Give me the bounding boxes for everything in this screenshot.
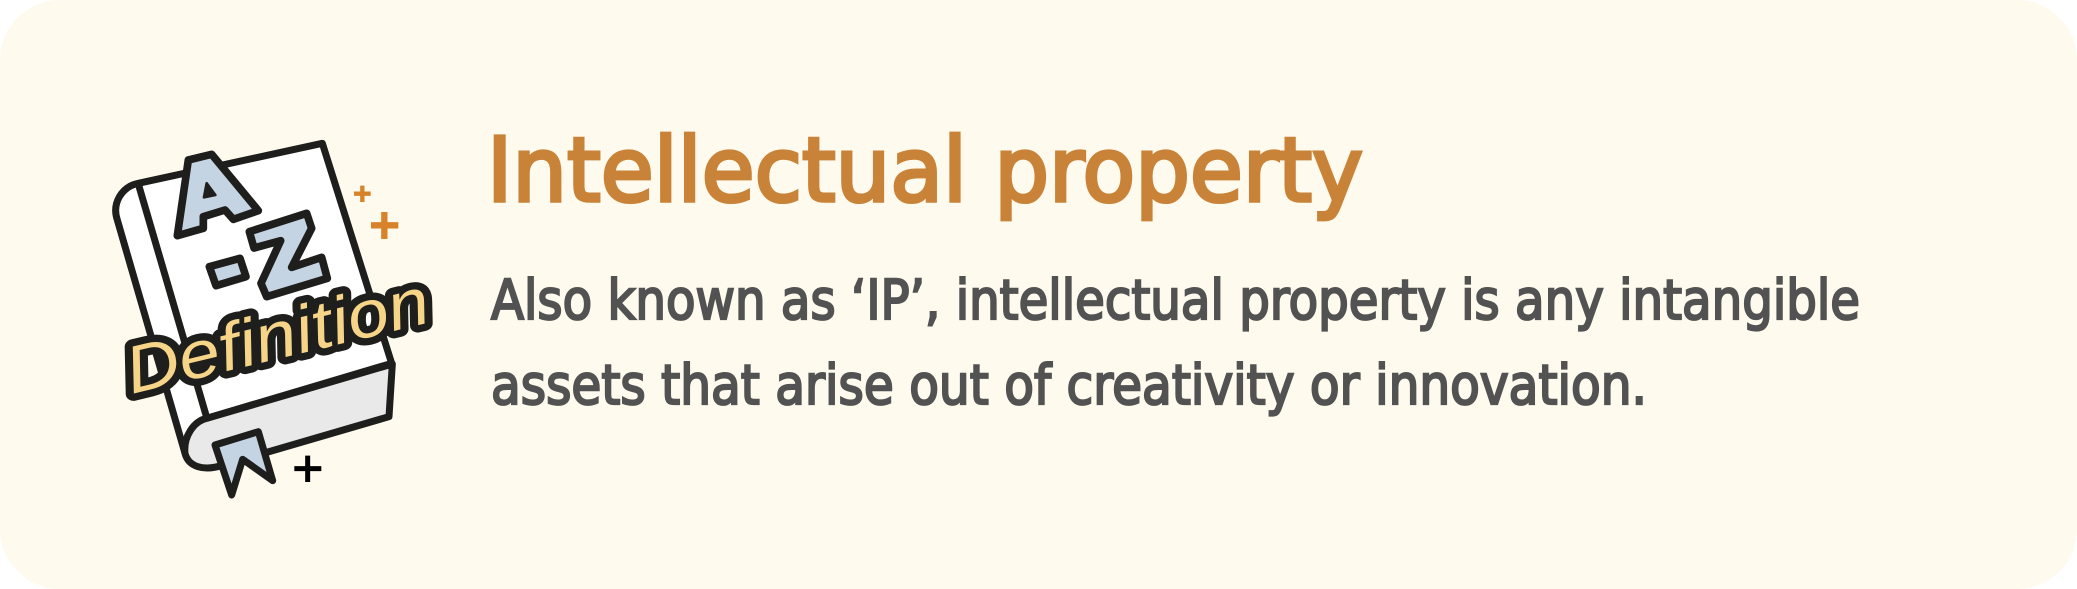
letter Z [249, 213, 327, 297]
description [491, 268, 1860, 417]
bookmark ribbon [215, 432, 273, 495]
letter A [177, 154, 258, 236]
letter A counter [204, 183, 215, 197]
banner word: Definition: Definition [118, 263, 436, 408]
spine line [138, 184, 207, 417]
book cover and pages [116, 143, 392, 453]
description line 2: assets that arise out of creativity or innovation. [491, 353, 1647, 417]
description line 1: Also known as ‘IP’, intellectual property is any intangible [491, 268, 1860, 332]
small orange plus [354, 186, 371, 202]
page edge [185, 364, 392, 468]
large orange plus [371, 212, 398, 239]
black plus [294, 456, 321, 482]
dash [209, 258, 246, 286]
icon: dictionary book [116, 143, 436, 495]
title: Intellectual property [487, 118, 1363, 222]
